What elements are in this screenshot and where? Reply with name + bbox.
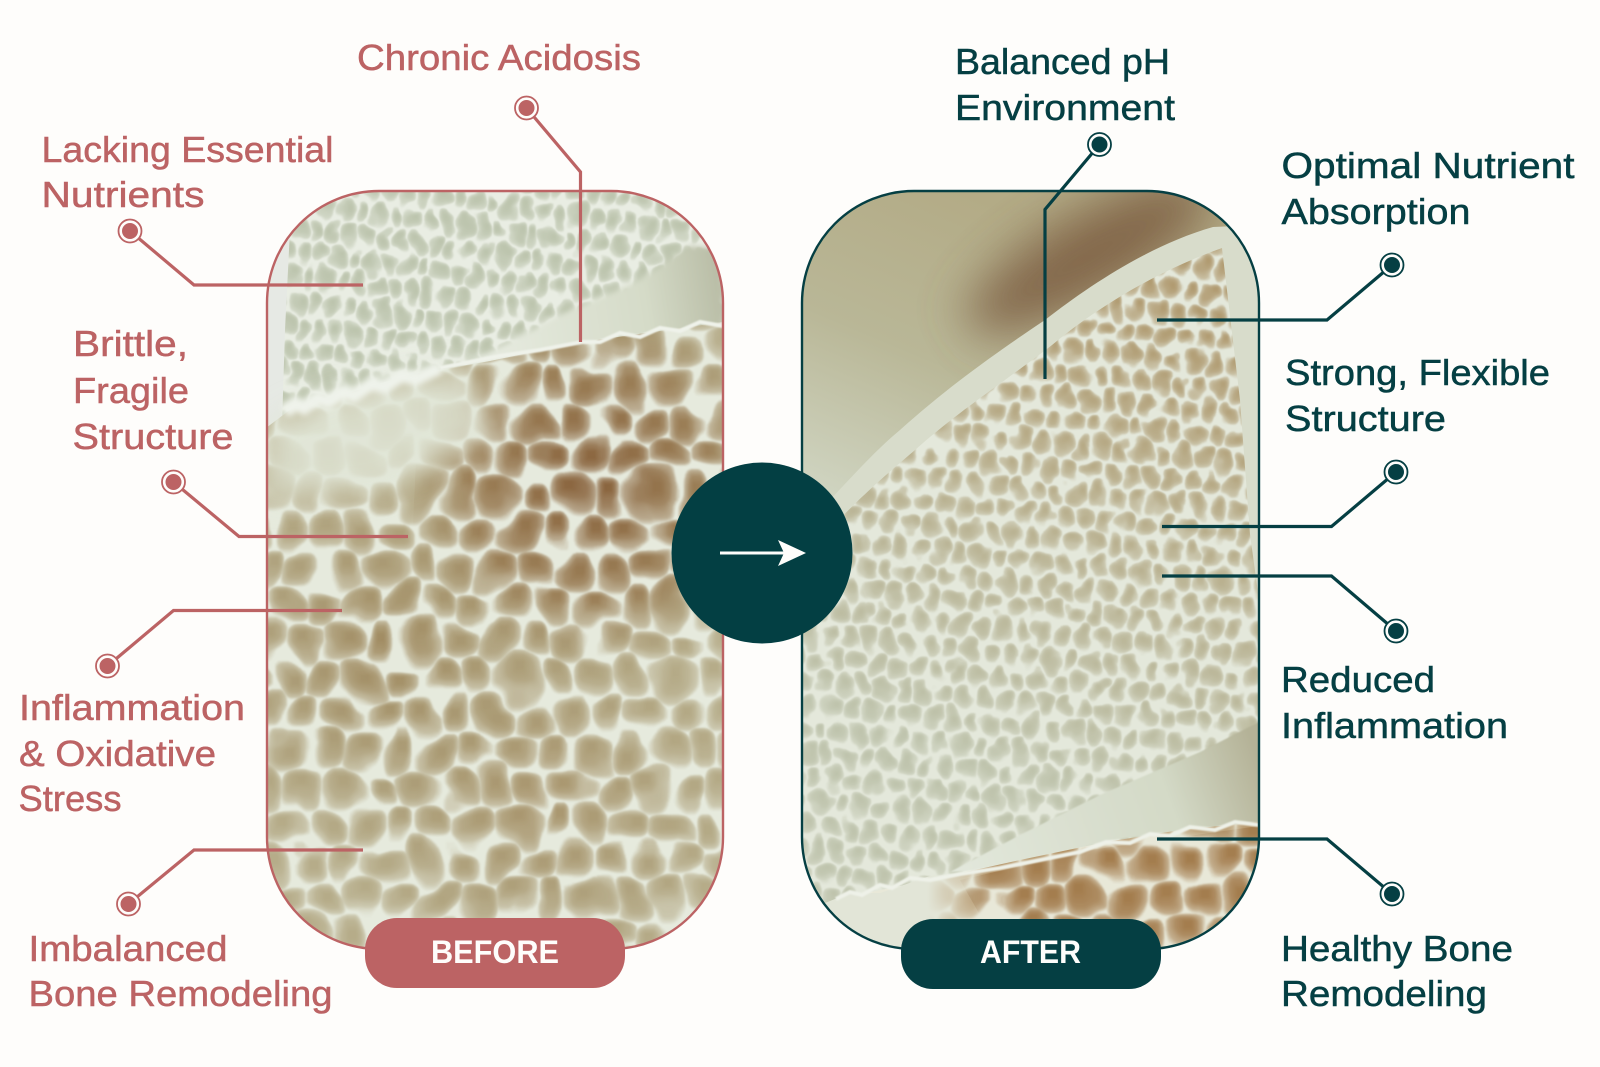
callout: optimal nutrient absorption: Absorption	[1282, 191, 1470, 232]
callout: strong flexible structure: Structure	[1285, 398, 1446, 439]
callout: brittle fragile structure: Brittle,	[73, 323, 188, 364]
callout: balanced ph environment: Balanced pH	[955, 41, 1170, 82]
callout: healthy bone remodeling	[1157, 839, 1513, 1014]
callout: reduced inflammation	[1162, 576, 1508, 746]
callout: inflammation and oxidative stress: Inflammation	[19, 687, 245, 728]
callout: balanced ph environment	[955, 41, 1175, 379]
panel outline: before	[267, 191, 723, 949]
callout: healthy bone remodeling: Healthy Bone	[1281, 928, 1513, 969]
callout: inflammation and oxidative stress: & Oxidative	[19, 733, 216, 774]
callout: brittle fragile structure	[72, 323, 408, 536]
after badge: AFTER	[980, 934, 1081, 970]
callout: imbalanced bone remodeling	[28, 850, 363, 1014]
callout: imbalanced bone remodeling: Imbalanced	[28, 928, 228, 969]
callout: strong flexible structure	[1162, 352, 1550, 526]
before badge: BEFORE	[431, 934, 559, 970]
callout: lacking essential nutrients: Lacking Essential	[42, 129, 334, 170]
callout: imbalanced bone remodeling: Bone Remodeling	[28, 973, 332, 1014]
callout: chronic acidosis	[357, 37, 641, 342]
callout: lacking essential nutrients	[42, 129, 363, 285]
panel outline: after	[802, 191, 1259, 949]
callout: chronic acidosis: Chronic Acidosis	[357, 37, 641, 78]
callout: strong flexible structure: Strong, Flexible	[1285, 352, 1550, 393]
callout: lacking essential nutrients: Nutrients	[42, 174, 204, 215]
callout: optimal nutrient absorption	[1157, 145, 1574, 320]
callout: brittle fragile structure: Structure	[72, 416, 234, 457]
callout: reduced inflammation: Reduced	[1281, 659, 1435, 700]
after badge	[901, 919, 1161, 989]
callout: inflammation and oxidative stress: Stress	[18, 778, 122, 819]
callout: reduced inflammation: Inflammation	[1281, 705, 1508, 746]
panel: after bone image	[801, 149, 1260, 950]
callout: healthy bone remodeling: Remodeling	[1281, 973, 1487, 1014]
callout: inflammation and oxidative stress	[18, 610, 342, 819]
before badge	[365, 918, 625, 988]
callout: balanced ph environment: Environment	[955, 87, 1175, 128]
arrow button: before to after	[672, 462, 852, 644]
callout: brittle fragile structure: Fragile	[73, 370, 189, 411]
callout: optimal nutrient absorption: Optimal Nutrient	[1282, 145, 1574, 186]
panel: before bone image	[266, 190, 724, 950]
